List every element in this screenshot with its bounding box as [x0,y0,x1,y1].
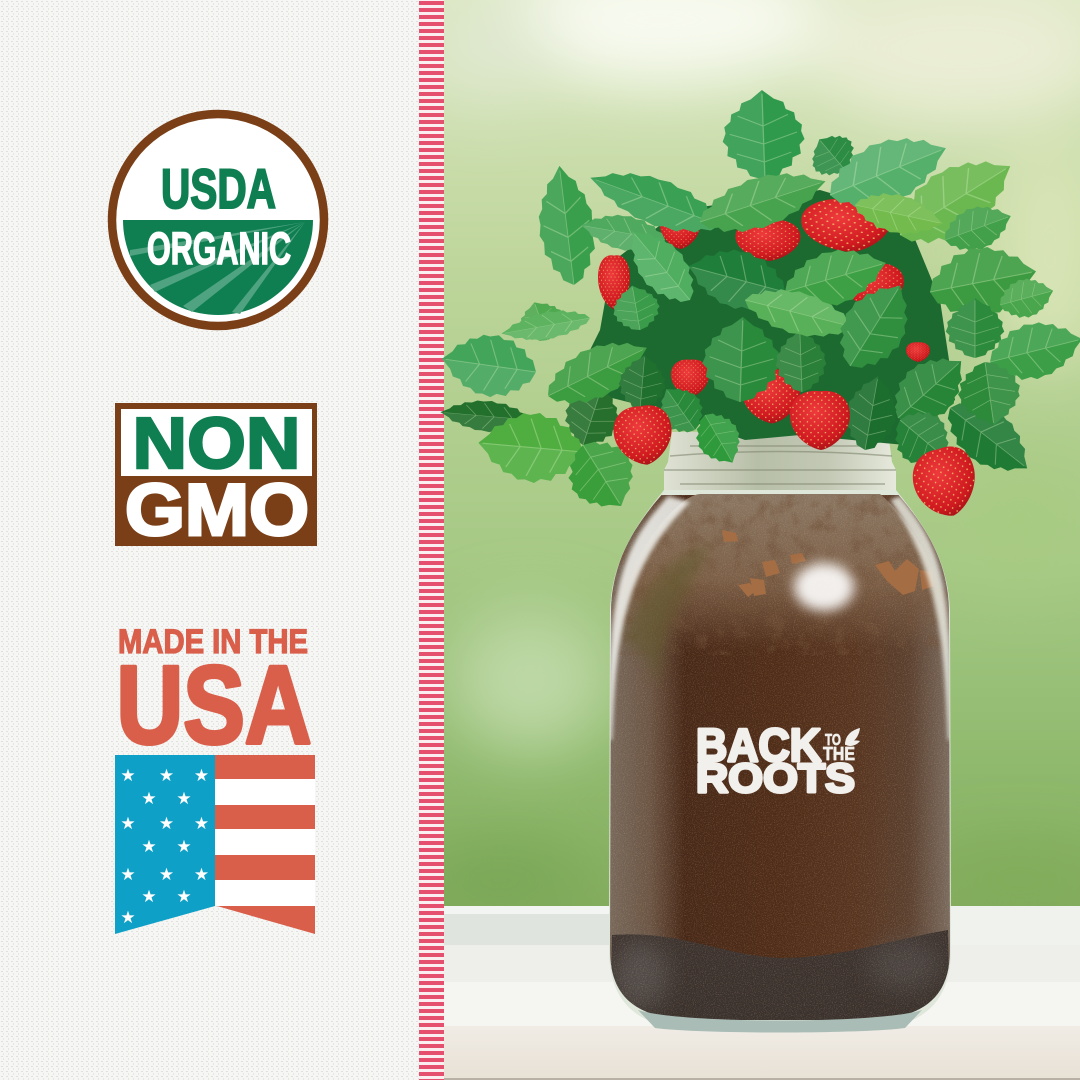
heading: Made in the USA: USA [116,644,312,767]
seal wordmark: USDA: USDA [161,157,276,220]
icon: American flag ribbon: ★ [194,814,209,834]
icon: American flag ribbon: ★ [120,865,136,885]
icon: American flag ribbon: ★ [120,814,136,834]
panel: window photo background [410,0,1080,910]
icon: American flag ribbon: ★ [120,908,136,928]
logo: Back to the Roots [696,719,860,801]
logo: Back to the Roots: TO [825,732,841,749]
seal field: green half circle [123,220,313,315]
illustration: front strawberries [611,391,983,524]
chunks of bark in soil [722,530,934,597]
heading: Made in the USA: MADE IN THE [118,623,308,661]
icon: American flag ribbon: ★ [159,865,174,885]
badge word: NON: NON [132,404,300,484]
icon: American flag ribbon: ★ [194,766,209,786]
logo: Back to the Roots: BACK [696,719,821,771]
badge word: GMO: GMO [125,470,309,551]
icon: American flag ribbon [115,755,315,934]
panel: pink striped divider [419,0,444,1080]
glare highlight [794,563,854,611]
icon: American flag ribbon: ★ [159,766,174,786]
illustration: strawberry plant foliage [438,89,1080,524]
moss on soil [626,546,708,672]
icon: American flag ribbon: ★ [141,789,157,809]
logo: Back to the Roots: ROOTS [696,755,855,801]
illustration: strawberries behind foliage [598,196,930,424]
logo: Back to the Roots: THE [823,744,855,764]
icon: American flag ribbon: ★ [176,837,192,857]
illustration: dark foliage mass [575,190,955,445]
icon: American flag ribbon: ★ [141,887,157,907]
icon: USDA Organic seal [112,114,324,326]
icon: American flag ribbon: ★ [176,887,192,907]
icon: American flag ribbon: ★ [194,865,209,885]
panel: window frame and sill [444,906,1080,1080]
glass base [638,1010,922,1032]
soil column [610,495,950,965]
panel: glass jar of soil [609,432,951,1032]
glass light reflections [609,496,690,740]
icon: American flag ribbon: ★ [120,766,136,786]
jar body glass [609,490,951,1030]
icon: American flag ribbon: ★ [159,814,174,834]
seal wordmark: ORGANIC: ORGANIC [147,223,291,274]
icon: American flag ribbon: ★ [141,837,157,857]
icon: American flag ribbon: ★ [176,789,192,809]
panel: woven fabric background [0,0,420,1080]
icon: Non GMO badge [115,403,317,551]
jar neck glass [664,432,896,495]
dark bottom soil layer [610,930,950,1026]
